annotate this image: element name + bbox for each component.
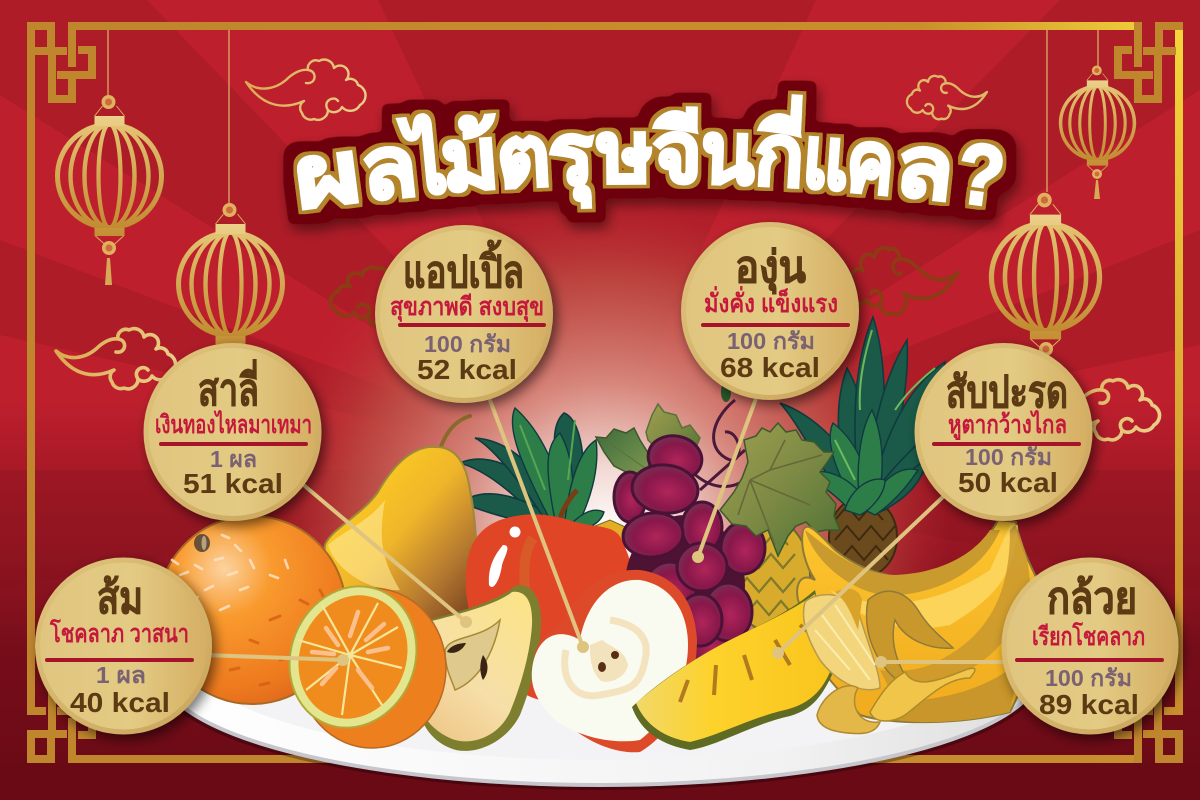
badge: pear: 51 kcal bbox=[183, 468, 283, 499]
title: ค bbox=[842, 113, 899, 213]
peeled banana bbox=[803, 589, 953, 690]
badge: banana: 89 kcal bbox=[1039, 689, 1139, 720]
badge: pear bbox=[144, 343, 322, 521]
title: แ bbox=[800, 110, 852, 209]
badge: apple: 100 กรัม bbox=[424, 331, 511, 357]
grape leaves small bbox=[596, 404, 700, 478]
badge: banana: 100 กรัม bbox=[1045, 665, 1132, 691]
badge: pineapple: 100 กรัม bbox=[965, 444, 1052, 470]
cloud left bbox=[56, 329, 176, 389]
title: ษ bbox=[596, 105, 653, 201]
lantern 3 bbox=[1061, 30, 1134, 199]
banana peel front bbox=[817, 668, 975, 734]
badge: grape: องุ่น bbox=[735, 243, 806, 295]
title: ไ bbox=[397, 113, 451, 214]
badge: apple: แอปเปิ้ล bbox=[403, 239, 524, 297]
title: ล bbox=[356, 117, 422, 219]
connector: pear bbox=[300, 482, 472, 628]
badge: orange: 40 kcal bbox=[70, 687, 170, 718]
badge: pineapple bbox=[914, 343, 1092, 521]
badge: apple bbox=[375, 225, 553, 403]
lantern 1 bbox=[58, 30, 162, 285]
badge: pineapple: สับปะรด bbox=[946, 368, 1068, 417]
pear back bbox=[325, 416, 478, 633]
apple back bbox=[466, 490, 635, 700]
badge: pear: สาลี่ bbox=[198, 359, 259, 415]
title: ล bbox=[891, 117, 959, 219]
apple half bbox=[532, 570, 697, 752]
badge: orange bbox=[35, 558, 212, 734]
grape leaf large bbox=[720, 423, 840, 556]
badge: pineapple: 50 kcal bbox=[958, 467, 1058, 498]
cloud behind grape badge bbox=[844, 248, 958, 314]
title: รุ bbox=[546, 106, 596, 209]
badge: grape: 100 กรัม bbox=[727, 328, 815, 354]
connector: banana bbox=[875, 656, 1010, 668]
title: กี่ bbox=[752, 93, 808, 205]
cloud top left bbox=[246, 60, 366, 120]
pear half bbox=[420, 585, 541, 751]
cloud top right bbox=[907, 76, 987, 119]
badge: apple: 52 kcal bbox=[417, 354, 517, 385]
title bbox=[288, 93, 1010, 227]
cloud behind apple badge bbox=[330, 267, 450, 325]
connector: orange bbox=[205, 654, 349, 666]
badge: apple: สุขภาพดี สงบสุข bbox=[390, 293, 544, 323]
lantern 2 bbox=[178, 30, 282, 354]
pineapple back right bbox=[780, 317, 950, 577]
title: ม้ bbox=[437, 110, 502, 210]
badge: banana bbox=[1002, 558, 1178, 734]
title: ? bbox=[952, 125, 1010, 226]
connector: pineapple bbox=[772, 495, 945, 659]
title: ต bbox=[494, 108, 553, 206]
banana bunch bbox=[797, 520, 1040, 722]
badge: pear: เงินทองไหลมาเทมา bbox=[155, 409, 312, 439]
orange whole bbox=[158, 516, 346, 704]
badge: grape: 68 kcal bbox=[720, 352, 820, 383]
lantern 4 bbox=[991, 30, 1100, 356]
badge: orange: ส้ม bbox=[97, 574, 143, 623]
badge: orange: 1 ผล bbox=[96, 662, 146, 688]
badge: grape bbox=[681, 222, 859, 400]
badge: banana: เรียกโชคลาภ bbox=[1032, 621, 1145, 651]
badge: orange: โชคลาภ วาสนา bbox=[49, 618, 189, 648]
plate bbox=[182, 680, 1026, 790]
title: ผ bbox=[288, 123, 366, 227]
connector: apple bbox=[488, 395, 589, 653]
title: จี bbox=[652, 105, 703, 201]
orange half bbox=[269, 567, 446, 748]
pineapple back left crown bbox=[460, 408, 604, 530]
badge: banana: กล้วย bbox=[1047, 574, 1137, 623]
badge: grape: มั่งคั่ง แข็งแรง bbox=[704, 286, 838, 318]
connector: grape bbox=[692, 393, 758, 563]
badge: pineapple: หูตากว้างไกล bbox=[948, 409, 1067, 441]
cloud right bbox=[1040, 380, 1160, 440]
pineapple slice bbox=[632, 590, 832, 750]
grape tendrils bbox=[690, 382, 745, 490]
title: น bbox=[699, 105, 757, 203]
pineapple mid yellow bbox=[590, 519, 810, 631]
grapes bbox=[614, 431, 765, 671]
badge: pear: 1 ผล bbox=[210, 446, 257, 472]
